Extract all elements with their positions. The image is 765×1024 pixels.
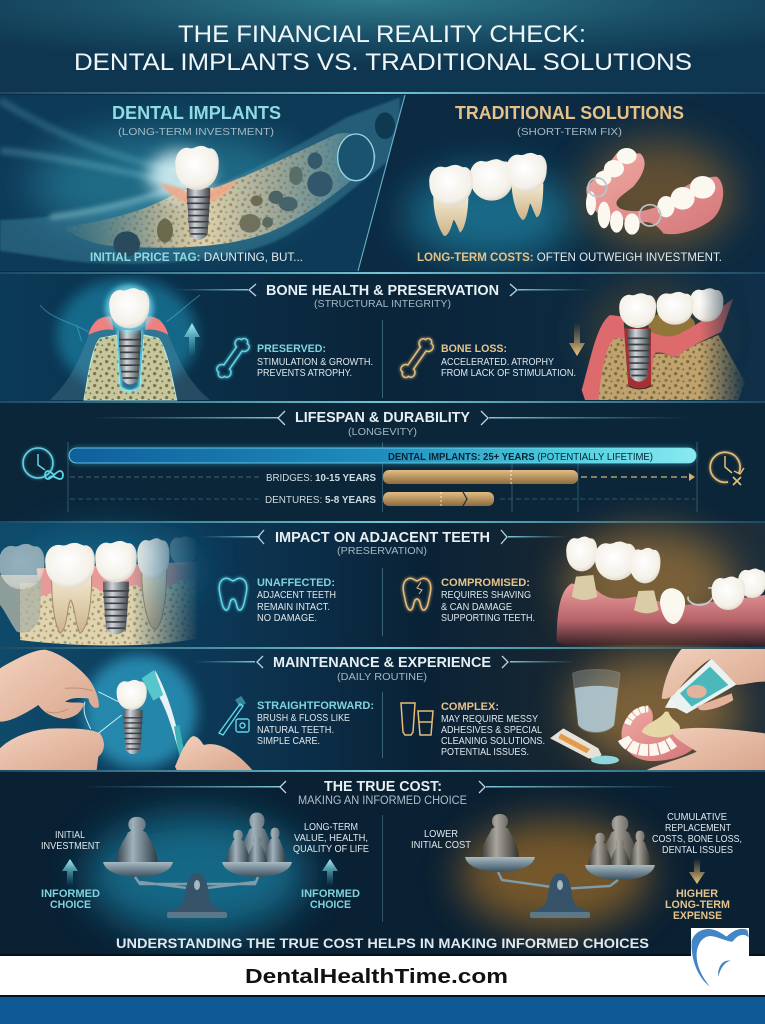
label: initial investment: INITIAL [55,829,85,841]
text: compromised: REQUIRES SHAVING [441,589,531,601]
icon: bone gold [398,335,436,381]
caption: initial price tag: INITIAL PRICE TAG: DAUNTING, BUT... [90,250,303,264]
text: complex: ADHESIVES & SPECIAL [441,724,542,736]
text: straightforward [257,700,374,747]
text: straightforward: NATURAL TEETH. [257,724,334,736]
label: higher long-term expense: EXPENSE [673,910,722,922]
section heading: (DAILY ROUTINE) [337,671,427,683]
text: complex [441,701,545,758]
text: preserved [257,343,373,379]
bar: dentures [70,492,695,506]
flossing and brushing illustration [0,650,252,770]
label: lower initial cost: INITIAL COST [411,839,472,851]
label: informed choice left: CHOICE [50,899,91,911]
section heading: IMPACT ON ADJACENT TEETH [275,530,490,546]
section heading [200,530,568,557]
section heading: THE TRUE COST: [324,779,442,795]
text: straightforward: SIMPLE CARE. [257,735,320,747]
implant preserving bone illustration [40,278,210,400]
text: straightforward: BRUSH & FLOSS LIKE [257,712,350,724]
bottom blue band [0,997,765,1024]
icon: bone cyan [214,335,252,381]
text: compromised: SUPPORTING TEETH. [441,612,535,624]
section heading: LIFESPAN & DURABILITY [295,410,470,426]
section heading: (LONGEVITY) [348,426,417,438]
panel: traditional solutions [358,95,765,271]
heading: traditional solutions: TRADITIONAL SOLUTIONS [455,103,684,123]
label: informed choice right [301,888,360,911]
label: higher long-term expense: LONG-TERM [665,899,730,911]
heading: dental implants: DENTAL IMPLANTS [112,103,281,123]
label: long-term value [293,821,369,855]
label: cumulative costs: COSTS, BONE LOSS, [652,833,742,845]
label: cumulative costs: CUMULATIVE [667,811,727,823]
arrow: left up [62,859,78,886]
label: informed choice left [41,888,100,911]
section heading: (PRESERVATION) [337,545,427,557]
label: higher long-term expense: HIGHER [676,888,718,900]
implant with bone loss illustration [582,288,745,400]
title: THE FINANCIAL REALITY CHECK: [178,21,586,48]
panel: adjacent teeth [0,523,765,648]
text: unaffected: REMAIN INTACT. [257,601,330,613]
section heading [175,283,591,310]
text: complex: CLEANING SOLUTIONS. [441,735,545,747]
text: complex: COMPLEX: [441,701,499,713]
text: complex: MAY REQUIRE MESSY [441,713,538,725]
label: long-term value: QUALITY OF LIFE [293,843,369,855]
text: compromised: COMPROMISED: [441,577,530,589]
text: unaffected: UNAFFECTED: [257,577,335,589]
arrow: down [689,858,705,884]
text: bone loss: ACCELERATED. ATROPHY [441,356,554,368]
timeline chart [69,447,696,506]
panel: dental implants [0,94,410,272]
title [74,21,692,76]
dental bridge illustration [429,153,547,236]
panel: lifespan [0,403,765,521]
label: informed choice right: CHOICE [310,899,351,911]
heading: dental implants: (LONG-TERM INVESTMENT) [118,126,274,138]
header panel with title [0,0,765,93]
bar: bridges [70,470,695,484]
panel: hero comparison [0,94,765,272]
icon: clock infinity [23,448,63,479]
label: informed choice right: INFORMED [301,888,360,900]
panel: true cost [0,772,765,955]
label: long-term value: VALUE, HEALTH, [294,832,368,844]
text: unaffected: NO DAMAGE. [257,612,317,624]
bone cross-section [0,97,400,264]
heading: dental implants [112,103,281,138]
section heading: MAINTENANCE & EXPERIENCE [273,655,491,671]
text: compromised [441,577,535,624]
panel: bone health [0,274,765,402]
label: cumulative costs: DENTAL ISSUES [662,844,733,856]
section heading [195,655,575,683]
text: bone loss: BONE LOSS: [441,343,507,355]
icon: clock expired [710,452,744,485]
bar: bridges: BRIDGES: 10-15 YEARS [266,472,376,484]
text: complex: POTENTIAL ISSUES. [441,746,529,758]
text: unaffected: ADJACENT TEETH [257,589,336,601]
text: bone loss: FROM LACK OF STIMULATION. [441,367,576,379]
text: preserved: PREVENTS ATROPHY. [257,367,352,379]
section heading [90,410,689,438]
bridge and prepared teeth illustration [557,537,765,645]
label: informed choice left: INFORMED [41,888,100,900]
label: higher long-term expense [665,888,730,922]
text: unaffected [257,577,336,624]
icon: adhesive tubes [401,703,433,735]
heading: traditional solutions: (SHORT-TERM FIX) [517,126,622,138]
logo: tooth [691,928,749,987]
footer band with site name: DentalHealthTime.com [245,965,508,988]
text: bone loss [441,343,576,379]
icon: healthy tooth [219,578,247,610]
tilted scale illustration [465,814,655,918]
arrow: right up [322,859,338,886]
heading: traditional solutions [455,103,684,138]
label: initial investment [41,829,101,852]
section heading: MAKING AN INFORMED CHOICE [298,795,467,807]
bar: implants: DENTAL IMPLANTS: 25+ YEARS (POTENTIALLY LIFETIME) [388,451,653,463]
partial denture illustration [586,148,723,235]
text: preserved: PRESERVED: [257,343,326,355]
icon: cracked tooth [403,578,431,610]
section heading [80,779,681,807]
label: long-term value: LONG-TERM [304,821,358,833]
section heading: (STRUCTURAL INTEGRITY) [314,298,451,310]
closing statement: UNDERSTANDING THE TRUE COST HELPS IN MAKING INFORMED CHOICES [116,935,649,951]
label: cumulative costs: REPLACEMENT [665,822,731,834]
title: DENTAL IMPLANTS VS. TRADITIONAL SOLUTIONS [74,49,692,76]
label: cumulative costs [652,811,742,856]
dental implant illustration [148,146,240,240]
arrow up [184,323,200,357]
bar: implants [69,447,696,464]
text: preserved: STIMULATION & GROWTH. [257,356,373,368]
balanced scale illustration [103,813,292,918]
footer band with site name [0,954,765,997]
icon: toothbrush and floss [219,697,249,735]
caption: long-term costs: LONG-TERM COSTS: OFTEN OUTWEIGH INVESTMENT. [417,250,722,264]
text: compromised: & CAN DAMAGE [441,601,512,613]
denture care illustration [550,649,765,770]
label: initial investment: INVESTMENT [41,840,101,852]
arrow down [569,323,585,356]
bar: dentures: DENTURES: 5-8 YEARS [265,494,376,506]
text: straightforward: STRAIGHTFORWARD: [257,700,374,712]
panel: maintenance [0,649,765,771]
label: lower initial cost: LOWER [424,828,458,840]
section heading: BONE HEALTH & PRESERVATION [266,283,499,299]
label: lower initial cost [411,828,472,851]
teeth with implant illustration [0,536,197,645]
